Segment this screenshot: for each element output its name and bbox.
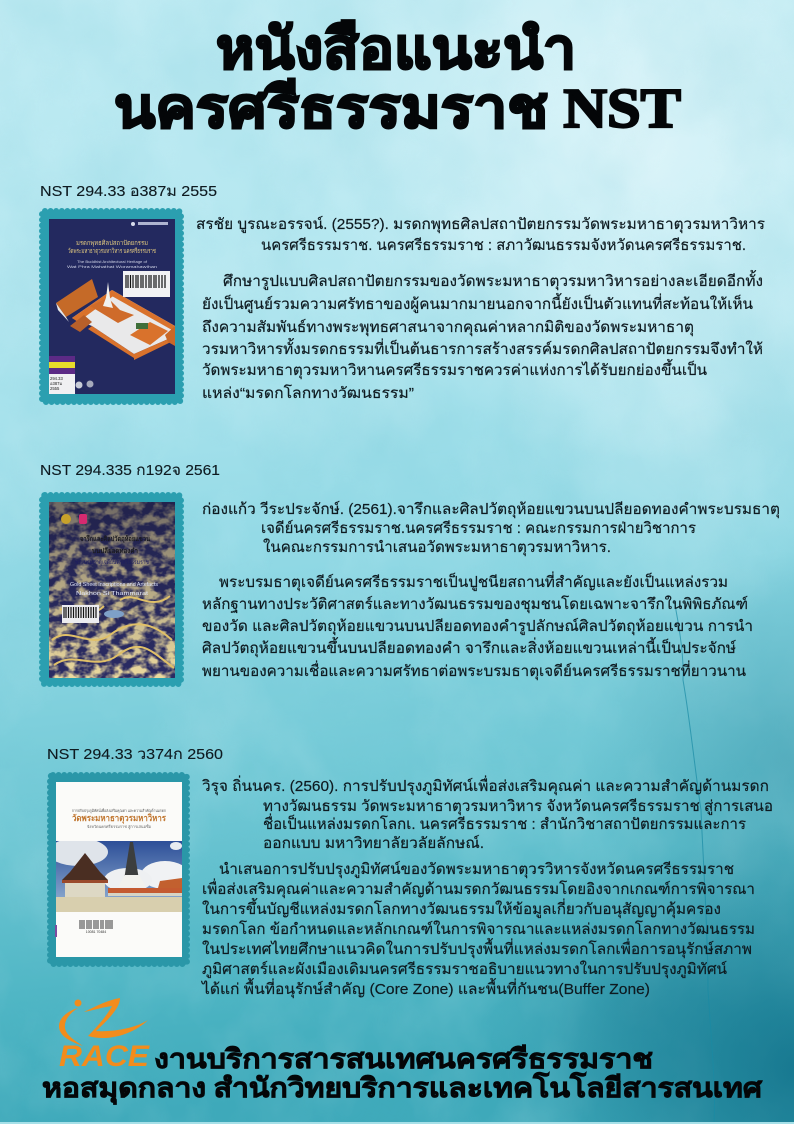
summary: book 1: ยังเป็นศูนย์รวมความศรัทธาของผู้คนมากมายนอกจากนี้ยังเป็นตัวแทนที่สะท้อนให้เห็น [202, 293, 753, 313]
citation: book 3: ทางวัฒนธรรม วัดพระมหาธาตุวรมหาวิหาร จังหวัดนครศรีธรรมราช สู่การเสนอ [263, 798, 773, 816]
footer: organisation name [42, 1044, 763, 1105]
summary: book 2 [202, 571, 753, 681]
summary: book 3: มรดกโลก ข้อกำหนดและหลักเกณฑ์ในการพิจารณาและแหล่งมรดกโลกทางวัฒนธรรม [202, 920, 755, 938]
barcode: 10081 70484 [86, 930, 106, 934]
summary: book 2: พระบรมธาตุเจดีย์นครศรีธรรมราชเป็นปูชนียสถานที่สำคัญและยังเป็นแหล่งรวม [219, 571, 728, 592]
call number: book 2: NST 294.335 ก192จ 2561 [40, 462, 220, 479]
summary: book 2: ของวัด และศิลปวัตถุห้อยแขวนบนปลียอดทองคำรูปลักษณ์ศิลปวัตถุห้อยแขวน การนำ [202, 618, 753, 636]
citation: book 1: สรชัย บูรณะอรรจน์. (2555?). มรดกพุทธศิลปสถาปัตยกรรมวัดพระมหาธาตุวรมหาวิหาร [196, 216, 765, 234]
book cover 3 in scalloped frame: จังหวัดนครศรีธรรมราช สู่การเสนอชื่อ [87, 824, 152, 830]
summary: book 1: ศึกษารูปแบบศิลปสถาปัตยกรรมของวัดพระมหาธาตุวรมหาวิหารอย่างละเอียดอีกทั้ง [223, 270, 763, 291]
citation: book 3 [201, 775, 773, 852]
summary: book 3: เพื่อส่งเสริมคุณค่าและความสำคัญด้านมรดกวัฒนธรรมโดยอิงจากเกณฑ์การพิจารณา [202, 878, 755, 899]
barcode sticker [62, 605, 99, 623]
book cover 2 in scalloped frame: บนปลียอดทองคำ [92, 547, 138, 555]
footer: organisation name: หอสมุดกลาง สำนักวิทยบริการและเทคโนโลยีสารสนเทศ [42, 1071, 763, 1105]
title: หนังสือแนะนำ [216, 19, 576, 81]
title: นครศรีธรรมราช NST [114, 78, 681, 140]
book cover 2 in scalloped frame [41, 494, 182, 685]
book cover 3 in scalloped frame [48, 774, 189, 965]
icon: RACE swoosh logo [59, 998, 148, 1046]
citation: book 3: ออกแบบ มหาวิทยาลัยวลัยลักษณ์. [263, 835, 484, 852]
temple illustration [56, 279, 175, 360]
temple photo [56, 841, 182, 912]
spine label [49, 356, 94, 394]
summary: book 1: แหล่ง“มรดกโลกทางวัฒนธรรม” [202, 384, 414, 402]
book cover 1 in scalloped frame: Wat Phra Mahathat Woramahawihan [67, 264, 157, 269]
citation: book 2 [202, 501, 780, 557]
book cover 1 in scalloped frame: The Buddhist Architectural Heritage of [77, 259, 148, 264]
book cover 1 in scalloped frame [41, 210, 182, 403]
citation: book 1: นครศรีธรรมราช. นครศรีธรรมราช : สภาวัฒนธรรมจังหวัดนครศรีธรรมราช. [261, 237, 746, 254]
book cover 2 in scalloped frame: พระบรมธาตุเจดีย์นครศรีธรรมราช [75, 558, 149, 566]
summary: book 2: หลักฐานทางประวัติศาสตร์และทางวัฒนธรรมของชุมชนโดยเฉพาะจารึกในพิพิธภัณฑ์ [202, 595, 748, 614]
book cover 2 in scalloped frame: Nakhon Si Thammarat [76, 591, 149, 597]
footer: organisation name: งานบริการสารสนเทศนครศรีธรรมราช [154, 1044, 653, 1074]
spine label: 2555 [50, 386, 60, 391]
summary: book 3 [201, 861, 755, 999]
citation: book 2: ก่องแก้ว วีระประจักษ์. (2561).จารึกและศิลปวัตถุห้อยแขวนบนปลียอดทองคำพระบรมธาตุ [202, 501, 780, 519]
citation: book 2: ในคณะกรรมการนำเสนอวัดพระมหาธาตุวรมหาวิหาร. [263, 538, 611, 557]
citation: book 3: วิรุจ ถิ่นนคร. (2560). การปรับปรุงภูมิทัศน์เพื่อส่งเสริมคุณค่า และความสำคัญด้านมรดก [201, 775, 769, 796]
title [114, 19, 681, 140]
book cover 1 in scalloped frame: มรดกพุทธศิลปสถาปัตยกรรม [76, 239, 148, 247]
barcode [80, 920, 112, 934]
spine label: อ387ม [50, 381, 63, 386]
summary: book 3: ได้แก่ พื้นที่อนุรักษ์สำคัญ (Core Zone) และพื้นที่กันชน(Buffer Zone) [201, 978, 650, 999]
summary: book 3: ภูมิศาสตร์และผังเมืองเดิมนครศรีธรรมราชอธิบายแนวทางในการปรับปรุงภูมิทัศน์ [202, 960, 727, 979]
book cover 3 in scalloped frame: วัดพระมหาธาตุวรมหาวิหาร [72, 813, 166, 824]
citation: book 3: ชื่อเป็นแหล่งมรดกโลกเ. นครศรีธรรมราช : สำนักวิชาสถาปัตยกรรมและการ [263, 813, 746, 833]
summary: book 2: ศิลปวัตถุห้อยแขวนขึ้นบนปลียอดทองคำ จารึกและสิ่งห้อยแขวนเหล่านี้เป็นประจักษ์ [202, 637, 736, 658]
call number: book 3: NST 294.33 ว374ก 2560 [47, 746, 223, 763]
summary: book 3: ในการขึ้นบัญชีแหล่งมรดกโลกทางวัฒนธรรมให้ข้อมูลเกี่ยวกับอนุสัญญาคุ้มครอง [202, 898, 721, 919]
book cover 3 in scalloped frame: การปรับปรุงภูมิทัศน์เพื่อส่งเสริมคุณค่า และความสำคัญด้านมรดก [72, 808, 166, 814]
summary: book 1: ถึงความสัมพันธ์ทางพระพุทธศาสนาจากคุณค่าหลากมิติของวัดพระมหาธาตุ [202, 319, 694, 337]
summary: book 1 [202, 270, 763, 402]
spine label: 294.33 [50, 376, 63, 381]
summary: book 1: วัดพระมหาธาตุวรมหาวิหานครศรีธรรมราชควรค่าแห่งการได้รับยกย่องขึ้นเป็น [202, 359, 707, 380]
summary: book 1: วรมหาวิหารทั้งมรดกธรรมที่เป็นต้นธารการสร้างสรรค์มรดกศิลปสถาปัตยกรรมจึงทำให้ [202, 338, 763, 358]
summary: book 2: พยานของความเชื่อและความศรัทธาต่อพระบรมธาตุเจดีย์นครศรีธรรมราชที่ยาวนาน [202, 660, 746, 681]
summary: book 3: ในประเทศไทยศึกษาแนวคิดในการปรับปรุงพื้นที่แหล่งมรดกโลกเพื่อการอนุรักษ์สภาพ [202, 938, 752, 959]
citation: book 2: เจดีย์นครศรีธรรมราช.นครศรีธรรมราช : คณะกรรมการฝ่ายวิชาการ [261, 520, 696, 537]
call number: book 1: NST 294.33 อ387ม 2555 [40, 183, 217, 200]
summary: book 3: นำเสนอการปรับปรุงภูมิทัศน์ของวัดพระมหาธาตุวรวิหารจังหวัดนครศรีธรรมราช [219, 861, 734, 879]
citation: book 1 [196, 216, 765, 254]
barcode sticker [123, 271, 170, 297]
book cover 1 in scalloped frame: วัดพระมหาธาตุวรมหาวิหาร นครศรีธรรมราช [68, 247, 156, 255]
book cover 2 in scalloped frame: Gold Sheet Inscriptions and Artefacts [70, 582, 158, 588]
logo wordmark: RACE [59, 1040, 150, 1073]
book cover 2 in scalloped frame: จารึกและศิลปวัตถุห้อยแขวน [80, 534, 150, 543]
